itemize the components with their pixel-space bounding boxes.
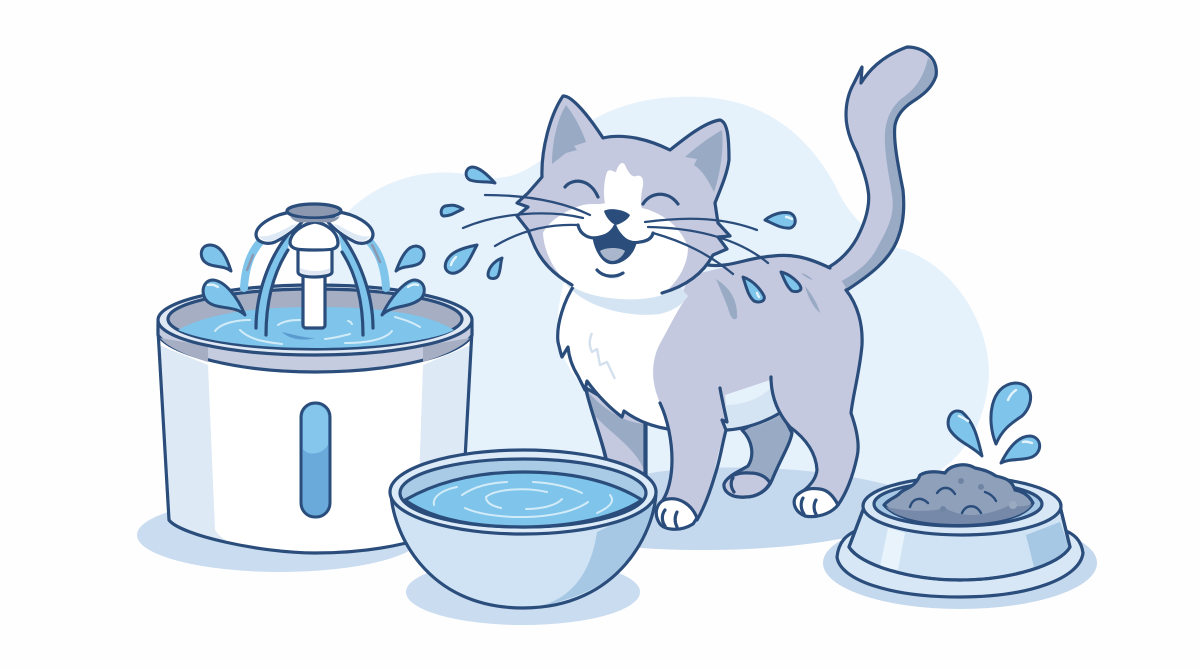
far front leg shading [588,392,644,470]
tongue [600,248,625,261]
cat far back leg [724,410,792,497]
fountain splash drops [201,245,424,315]
bowl outline [391,492,656,608]
bowl rim [863,477,1061,535]
chest fur marks [590,333,615,379]
right nozzle petal [328,212,373,243]
head outline [517,96,730,293]
food bumps [910,488,996,513]
tail outline [825,47,936,290]
rim inner wall [168,289,462,349]
food splash drops [948,383,1040,463]
cat hind paw [794,489,838,517]
water drops near cat [441,167,801,302]
cat front paw [656,499,697,529]
stem [298,248,332,328]
background blob [330,97,989,540]
cat far front leg [586,388,646,490]
bowl inner wall [400,459,646,527]
rim lower band [158,322,472,372]
open mouth [594,226,635,263]
cat body [653,255,862,520]
water shadow [282,332,315,340]
bowl rim [390,450,656,534]
bowl light reflection [880,528,905,570]
water bowl ground shadow [406,559,640,625]
chin [597,271,623,279]
bowl body [391,492,656,608]
left inner ear [552,105,586,164]
cap neck [290,216,340,222]
food mound [884,465,1033,525]
food bits [940,478,984,512]
right inner ear [685,130,723,192]
left nozzle petal [256,212,302,243]
drop highlights [208,217,1032,443]
food shadow [886,504,1032,524]
bowl water [405,472,642,527]
body right shading [417,345,471,540]
water bowl [390,450,656,608]
band right end shade [423,338,470,362]
center nozzle [290,222,338,250]
water surface [178,307,454,348]
collar shadow [566,270,688,315]
cat body outlines [558,255,862,520]
water level window [301,403,330,517]
cat head [517,96,730,299]
fountain [158,204,472,553]
chin line [597,270,623,276]
far paw toe [731,478,734,492]
right eye [643,194,678,204]
food bowl [837,465,1083,597]
smile line [578,225,653,243]
band left end shade [160,338,208,362]
cat back stripes [716,273,820,319]
stem collar [298,248,332,277]
bowl body [849,506,1070,580]
water ripples [434,482,612,517]
fountain body [158,330,472,553]
nozzle cap [287,204,341,218]
body outline [158,330,472,553]
bowl shade [1026,522,1069,567]
water ripples [215,317,420,344]
whiskers [463,195,768,274]
food bowl ground shadow [823,517,1097,609]
far paw [724,473,770,497]
cat white chest [558,270,688,429]
front water streams [256,230,373,335]
bowl base [837,520,1083,597]
bowl inner [874,482,1042,526]
bowl shade [540,505,654,606]
fountain ground shadow [137,498,423,572]
bowl outline [849,506,1070,580]
tail shading [840,58,936,290]
left eye [565,181,598,197]
rim top [158,285,472,355]
cat ground shadow [640,467,905,550]
nose [604,209,630,225]
white face [543,163,688,299]
back water streams [244,240,386,288]
cat tail [825,47,936,290]
cat belly highlight [725,388,782,431]
body left shading [159,345,237,545]
